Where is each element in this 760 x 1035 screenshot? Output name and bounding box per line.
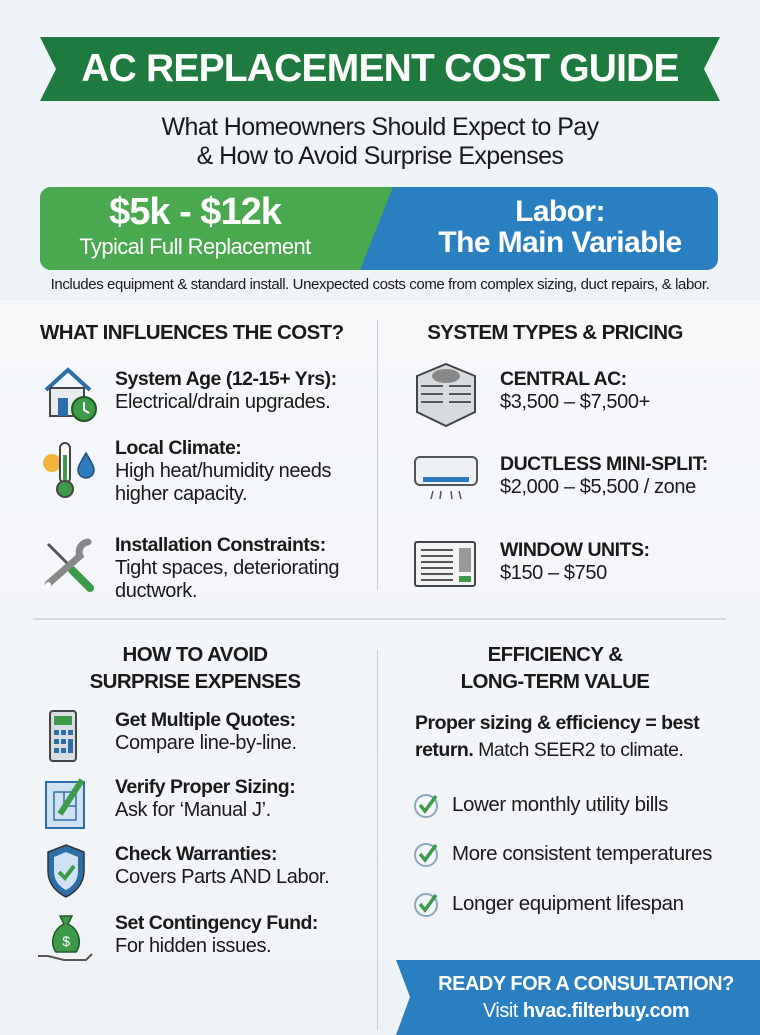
heading: how to avoid: HOW TO AVOID [122,643,268,666]
item: warranties: Covers Parts AND Labor. [115,866,329,888]
checklist [414,793,712,917]
item: ductless: DUCTLESS MINI-SPLIT: [500,453,708,475]
icon: house clock [44,367,97,422]
icon: money bag [38,915,93,961]
item: installation constraints: Tight spaces, deteriorating [115,557,339,579]
icon: climate [43,442,95,498]
item: system age: System Age (12-15+ Yrs): [115,368,337,390]
icon: window unit [414,541,476,587]
check item 3 [414,892,684,917]
checklist: Longer equipment lifespan [452,892,684,915]
icon: blueprint [45,778,85,829]
CTA text [438,973,734,1022]
CTA banner [396,960,760,1035]
efficiency text: return. Match SEER2 to climate. [415,739,683,761]
price range: $5k - $12k [109,191,281,233]
heading: how to avoid: SURPRISE EXPENSES [90,670,300,693]
icon: tools [44,538,94,592]
item: installation constraints: Installation Constraints: [115,534,326,556]
heading: system types: SYSTEM TYPES & PRICING [427,321,683,344]
item: central ac: $3,500 – $7,500+ [500,391,650,413]
item: window units: WINDOW UNITS: [500,539,649,561]
heading: efficiency [461,643,650,693]
item: window units [414,539,649,587]
heading: efficiency: LONG-TERM VALUE [461,670,649,693]
item: sizing [45,776,295,829]
subtitle: & How to Avoid Surprise Expenses [197,142,563,170]
item: installation constraints: ductwork. [115,580,197,602]
efficiency text: Proper sizing & efficiency = best [415,712,699,734]
item: warranties: Check Warranties: [115,843,277,865]
title banner [40,37,720,101]
labor callout [438,195,682,259]
item: local climate: High heat/humidity needs [115,460,331,482]
icon: money bag: $ [62,933,70,949]
CTA text: READY FOR A CONSULTATION? [438,973,734,995]
heading: how to avoid [90,643,300,693]
item: warranties [47,843,329,898]
item: ductless: $2,000 – $5,500 / zone [500,476,696,498]
icon: mini split [414,456,478,500]
item: central ac: CENTRAL AC: [500,368,627,390]
price bar [40,187,718,270]
icon: condenser [416,362,476,428]
price range [79,191,312,259]
icon: shield [47,844,85,898]
item: local climate [43,437,331,505]
note: Includes equipment & standard install. Unexpected costs come from complex sizing, duct repairs, & labor. [51,276,709,293]
labor callout: The Main Variable [438,226,682,259]
check item 2 [414,842,712,867]
item: installation constraints [44,534,339,602]
item: system age [44,367,337,422]
checklist: More consistent temperatures [452,842,712,865]
item: system age: Electrical/drain upgrades. [115,391,330,413]
item: central ac [416,362,650,428]
title: AC REPLACEMENT COST GUIDE [81,47,679,90]
item: sizing: Verify Proper Sizing: [115,776,295,798]
subtitle: What Homeowners Should Expect to Pay [162,113,598,141]
item: sizing: Ask for ‘Manual J’. [115,799,271,821]
item: contingency: Set Contingency Fund: [115,912,318,934]
heading: what influences: WHAT INFLUENCES THE COST? [40,321,344,344]
item: window units: $150 – $750 [500,562,607,584]
item: contingency: For hidden issues. [115,935,271,957]
efficiency text [415,712,700,761]
subtitle [162,113,599,170]
item: quotes: Get Multiple Quotes: [115,709,296,731]
item: ductless [414,453,708,500]
icon: calculator [49,710,77,762]
checklist: Lower monthly utility bills [452,793,668,816]
labor callout: Labor: [515,195,605,228]
item: contingency [38,912,318,961]
item: quotes: Compare line-by-line. [115,732,297,754]
CTA text: Visit hvac.filterbuy.com [483,1000,689,1022]
item: local climate: higher capacity. [115,483,247,505]
check item 1 [414,793,668,818]
item: quotes [49,709,297,762]
heading: efficiency: EFFICIENCY & [488,643,622,666]
item: local climate: Local Climate: [115,437,241,459]
price range: Typical Full Replacement [79,234,311,259]
